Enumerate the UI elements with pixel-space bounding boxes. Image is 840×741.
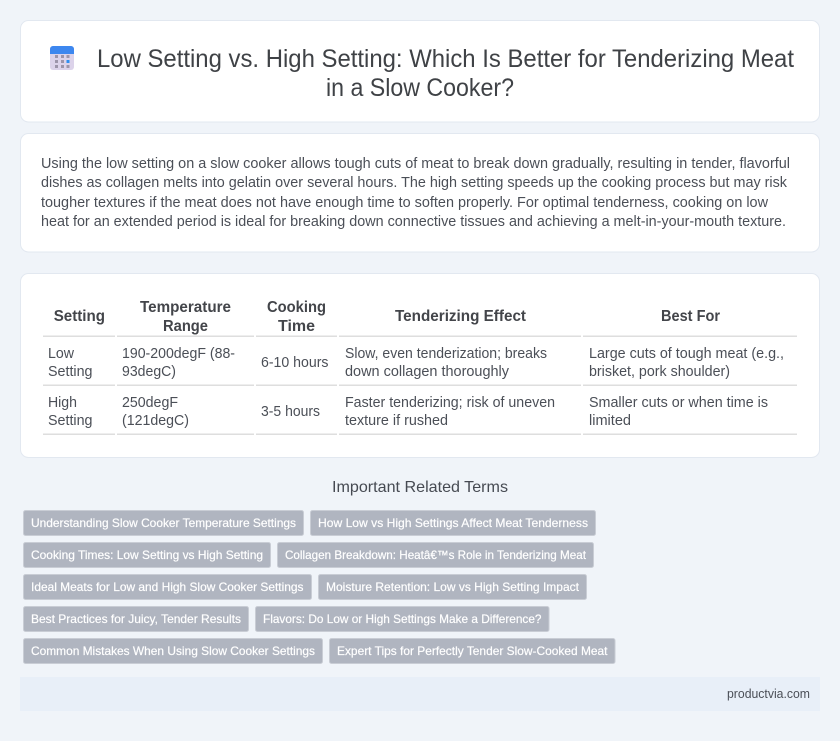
table row: low setting: Low — [48, 346, 75, 362]
chip: Moisture Retention: Low vs High Setting Impact — [326, 580, 580, 594]
table row: high setting: Setting — [48, 413, 92, 429]
chip — [24, 606, 248, 632]
heading: important related terms: Important Related Terms — [332, 479, 508, 496]
table row: high setting: (121degC) — [122, 413, 189, 429]
table row: low setting: Slow, even tenderization; breaks — [345, 346, 547, 362]
text block: introduction — [41, 156, 790, 230]
table row: low setting: 6-10 hours — [261, 355, 328, 371]
table row: low setting: down collagen thoroughly — [345, 364, 510, 380]
table row: high setting: Smaller cuts or when time is — [589, 395, 768, 411]
chip: Understanding Slow Cooker Temperature Settings — [31, 516, 296, 530]
chip: Best Practices for Juicy, Tender Results — [31, 612, 241, 626]
table row: low setting: 190-200degF (88- — [122, 346, 235, 362]
chip — [310, 510, 596, 536]
table row: high setting: limited — [589, 413, 631, 429]
chip — [24, 542, 270, 568]
table row: low setting: Setting — [48, 364, 92, 380]
table header row: Setting — [54, 308, 105, 325]
table row: high setting: 3-5 hours — [261, 404, 320, 420]
panel: comparison table — [20, 274, 820, 458]
table row: low setting: brisket, pork shoulder) — [589, 364, 730, 380]
chip — [24, 574, 312, 600]
table header row: Temperature — [140, 299, 231, 316]
panel: title header — [20, 20, 820, 122]
title: Low Setting vs. High Setting: Which Is Better for Tenderizing Meat — [97, 45, 794, 73]
title: in a Slow Cooker? — [326, 74, 514, 102]
title — [97, 45, 794, 102]
table header row: Tenderizing Effect — [395, 308, 527, 325]
chip: How Low vs High Settings Affect Meat Tenderness — [318, 516, 588, 530]
panel: introduction paragraph — [20, 134, 820, 252]
chip — [278, 542, 594, 568]
text block: introduction: tougher textures if the meat does not have enough time to soften properly. For optimal tenderness, cooking on low — [41, 195, 769, 211]
table header row: Cooking — [267, 299, 326, 316]
icon: calendar — [50, 46, 74, 70]
table header row: Time — [278, 318, 315, 335]
table row: high setting: Faster tenderizing; risk of uneven — [345, 395, 555, 411]
table row: high setting — [48, 395, 768, 429]
table row: low setting: 93degC) — [122, 364, 176, 380]
text block: introduction: dishes as collagen melts into gelatin over several hours. The high setting speeds up the cooking process but may risk — [41, 175, 788, 191]
table row: low setting: Large cuts of tough meat (e.g., — [589, 346, 784, 362]
table row: high setting: 250degF — [122, 395, 178, 411]
chip: Ideal Meats for Low and High Slow Cooker Settings — [31, 580, 304, 594]
chip — [256, 606, 549, 632]
chip: Expert Tips for Perfectly Tender Slow-Cooked Meat — [337, 644, 608, 658]
footer source text: productvia.com — [727, 686, 810, 701]
table row: high setting: texture if rushed — [345, 413, 448, 429]
text block: introduction: heat for an extended period is ideal for breaking down connective tissues and achieving a melt-in-your-mouth texture. — [41, 214, 786, 230]
table header row: Range — [163, 318, 208, 335]
table header row — [54, 299, 720, 335]
chip — [318, 574, 586, 600]
chip — [24, 510, 304, 536]
table header row: Best For — [661, 308, 720, 325]
chip: Common Mistakes When Using Slow Cooker Settings — [31, 644, 315, 658]
table row: high setting: High — [48, 395, 77, 411]
footer — [20, 677, 820, 711]
panel: related term chips — [24, 510, 615, 664]
chip: Collagen Breakdown: Heatâ€™s Role in Tenderizing Meat — [285, 548, 587, 562]
text block: introduction: Using the low setting on a slow cooker allows tough cuts of meat to break down gradually, resulting in tender, flavorful — [41, 156, 790, 172]
chip — [24, 638, 322, 664]
chip: Flavors: Do Low or High Settings Make a Difference? — [263, 612, 542, 626]
chip — [330, 638, 615, 664]
table row: low setting — [48, 346, 784, 380]
chip: Cooking Times: Low Setting vs High Setting — [31, 548, 263, 562]
